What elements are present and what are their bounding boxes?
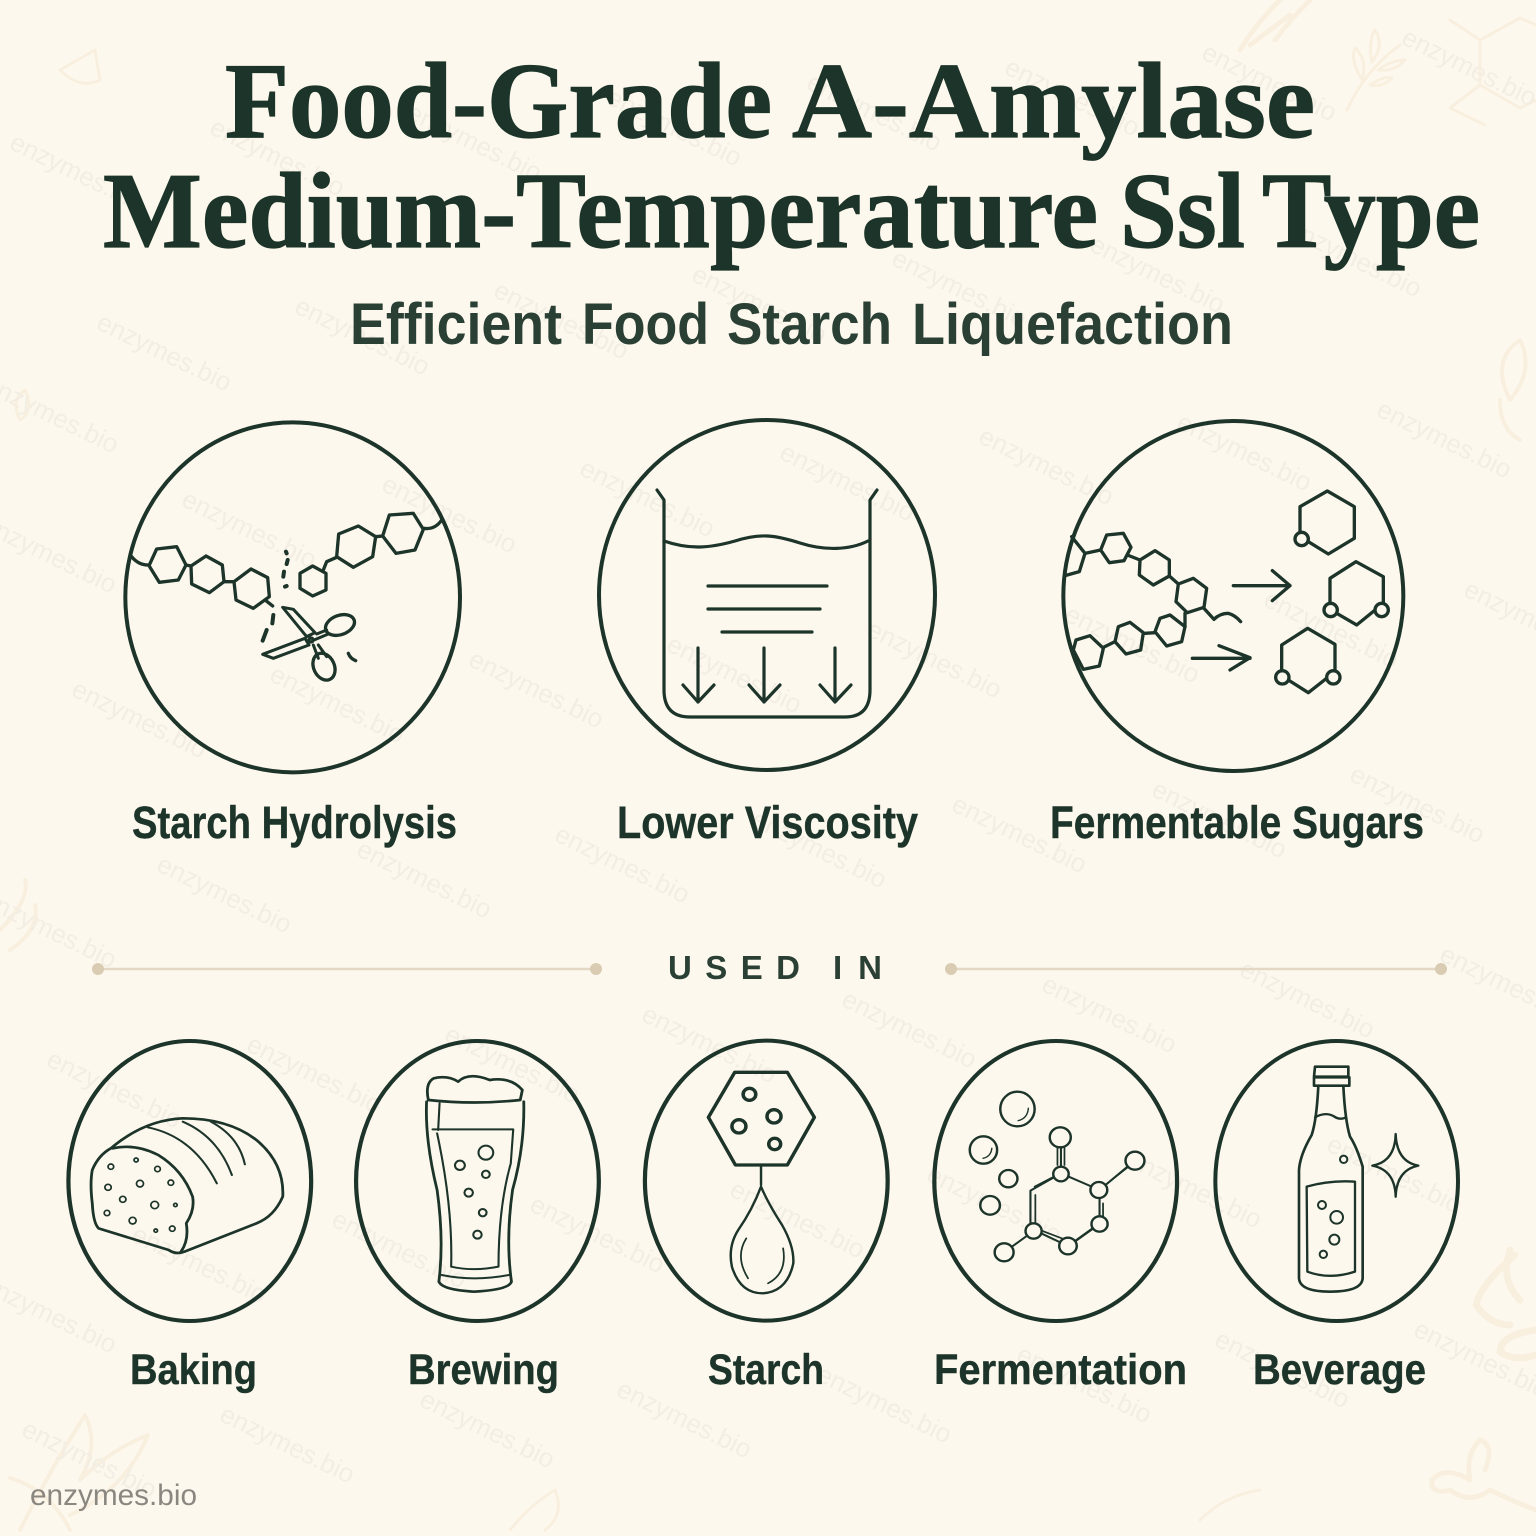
label: fermentable sugars: Fermentable Sugars xyxy=(1050,797,1424,848)
background watermark pattern: enzymes.bio xyxy=(242,1028,387,1119)
background watermark pattern: enzymes.bio xyxy=(1235,953,1380,1044)
background watermark pattern: enzymes.bio xyxy=(802,66,947,157)
background watermark pattern: enzymes.bio xyxy=(812,1358,957,1449)
background watermark pattern: enzymes.bio xyxy=(725,1173,870,1264)
background watermark pattern: enzymes.bio xyxy=(575,452,720,543)
brand footer: enzymes.bio xyxy=(30,1479,197,1512)
background watermark pattern: enzymes.bio xyxy=(662,628,807,719)
background watermark pattern: enzymes.bio xyxy=(775,436,920,527)
divider: used in xyxy=(92,949,1447,986)
title: Type xyxy=(1262,152,1480,271)
icon: lower viscosity xyxy=(599,420,935,770)
background watermark pattern: enzymes.bio xyxy=(550,818,695,909)
background watermark pattern: enzymes.bio xyxy=(352,833,497,924)
background watermark pattern: enzymes.bio xyxy=(5,126,150,217)
icon: fermentable sugars xyxy=(1063,421,1403,771)
title: Medium-Temperature xyxy=(103,152,1098,271)
background watermark pattern: enzymes.bio xyxy=(1012,1338,1157,1429)
background watermark pattern: enzymes.bio xyxy=(1122,1143,1267,1234)
background watermark pattern: enzymes.bio xyxy=(1259,583,1404,674)
title: Ssl xyxy=(1120,152,1245,271)
icon: fermentation xyxy=(934,1041,1177,1321)
background watermark pattern: enzymes.bio xyxy=(637,998,782,1089)
background watermark pattern: enzymes.bio xyxy=(922,1158,1067,1249)
background watermark pattern: enzymes.bio xyxy=(205,111,350,202)
background watermark pattern: enzymes.bio xyxy=(1345,758,1490,849)
subtitle: Efficient xyxy=(350,292,562,357)
icon: brewing xyxy=(356,1041,599,1321)
label: fermentation: Fermentation xyxy=(934,1346,1187,1394)
background watermark pattern: enzymes.bio xyxy=(464,643,609,734)
background watermark pattern: enzymes.bio xyxy=(42,1043,187,1134)
background watermark pattern: enzymes.bio xyxy=(602,81,747,172)
subtitle xyxy=(350,292,1233,357)
label: beverage: Beverage xyxy=(1253,1346,1426,1394)
background watermark pattern: enzymes.bio xyxy=(489,274,634,365)
background watermark pattern: enzymes.bio xyxy=(92,306,237,397)
background watermark pattern: enzymes.bio xyxy=(402,96,547,187)
label: starch hydrolysis: Starch Hydrolysis xyxy=(132,797,457,848)
background watermark pattern: enzymes.bio xyxy=(1372,393,1517,484)
subtitle: Liquefaction xyxy=(912,292,1233,357)
divider: used in: IN xyxy=(833,949,882,986)
title xyxy=(103,42,1480,271)
background watermark pattern: enzymes.bio xyxy=(612,1373,757,1464)
background watermark pattern: enzymes.bio xyxy=(152,848,297,939)
background watermark pattern: enzymes.bio xyxy=(1000,51,1145,142)
background watermark pattern: enzymes.bio xyxy=(837,983,982,1074)
background watermark pattern: enzymes.bio xyxy=(1172,406,1317,497)
background watermark pattern: enzymes.bio xyxy=(377,468,522,559)
background watermark pattern: enzymes.bio xyxy=(1210,1323,1355,1414)
divider: used in: USED xyxy=(668,949,800,986)
background watermark pattern: enzymes.bio xyxy=(1060,598,1205,689)
icon: beverage xyxy=(1215,1041,1458,1321)
label: lower viscosity: Lower Viscosity xyxy=(617,797,918,848)
icon: starch hydrolysis xyxy=(125,422,460,772)
background watermark pattern: enzymes.bio xyxy=(440,1018,585,1109)
title: A-Amylase xyxy=(792,42,1315,161)
title: Food-Grade xyxy=(225,42,772,161)
background watermark pattern: enzymes.bio xyxy=(1197,36,1342,127)
background watermark pattern: enzymes.bio xyxy=(747,803,892,894)
background watermark pattern: enzymes.bio xyxy=(215,1398,360,1489)
background watermark pattern: enzymes.bio xyxy=(525,1188,670,1279)
label: starch: Starch xyxy=(708,1346,824,1394)
background watermark pattern: enzymes.bio xyxy=(177,483,322,574)
background watermark pattern: enzymes.bio xyxy=(1282,212,1427,303)
background watermark pattern: enzymes.bio xyxy=(1085,228,1230,319)
background watermark pattern: enzymes.bio xyxy=(974,420,1119,511)
background watermark pattern: enzymes.bio xyxy=(415,1383,560,1474)
background watermark pattern: enzymes.bio xyxy=(687,258,832,349)
background watermark pattern: enzymes.bio xyxy=(1037,968,1182,1059)
background watermark pattern: enzymes.bio xyxy=(290,290,435,381)
background watermark pattern: enzymes.bio xyxy=(127,1218,272,1309)
subtitle: Food xyxy=(582,292,709,357)
background watermark pattern: enzymes.bio xyxy=(265,658,410,749)
icon: baking xyxy=(68,1041,311,1321)
icon: starch xyxy=(645,1041,888,1321)
background watermark pattern: enzymes.bio xyxy=(947,788,1092,879)
label: baking: Baking xyxy=(130,1346,257,1394)
background watermark pattern: enzymes.bio xyxy=(887,242,1032,333)
subtitle: Starch xyxy=(727,292,892,357)
background watermark pattern: enzymes.bio xyxy=(17,1413,162,1504)
background watermark pattern: enzymes.bio xyxy=(1322,1128,1467,1219)
background watermark pattern: enzymes.bio xyxy=(1147,773,1292,864)
background watermark pattern: enzymes.bio xyxy=(862,613,1007,704)
label: brewing: Brewing xyxy=(408,1346,559,1394)
background watermark pattern: enzymes.bio xyxy=(67,673,212,764)
background watermark pattern: enzymes.bio xyxy=(327,1203,472,1294)
